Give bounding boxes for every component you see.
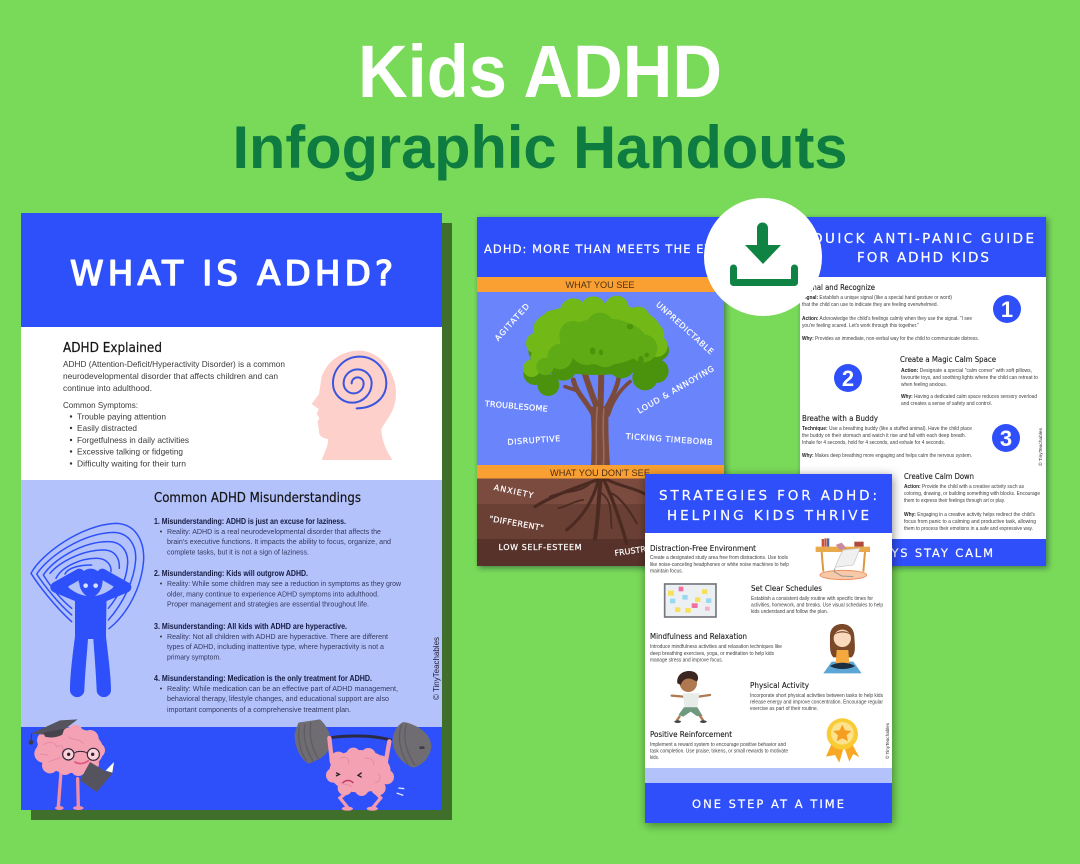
strategy 3 text: Introduce mindfulness activities and relaxation techniques like <box>650 644 782 650</box>
section: ADHD explained text: ADHD Explained <box>63 341 162 356</box>
step 4 text: focus from panic to a calming and productive task, allowing <box>904 519 1036 525</box>
step 2 text: Create a Magic Calm Space <box>900 355 996 364</box>
step 2 text: Why: Having a dedicated calm space reduces sensory overload <box>901 394 1037 400</box>
strategy 2 text: Establish a consistent daily routine with specific times for <box>751 596 873 602</box>
step 1 text: Signal and Recognize <box>802 283 875 292</box>
section: misunderstandings text: 1. Misunderstanding: ADHD is just an excuse for laziness. <box>154 517 346 526</box>
section: ADHD explained text: Excessive talking or fidgeting <box>77 446 183 456</box>
labels around tree: "DIFFERENT" <box>489 514 544 533</box>
credit: Tiny Teachables: © TinyTeachables <box>432 637 441 700</box>
section: misunderstandings text: 4. Misunderstanding: Medication is the only treatment for ADHD. <box>154 674 372 683</box>
section: ADHD explained text <box>63 341 285 468</box>
icon: number 1 <box>993 295 1021 323</box>
band: what you see: WHAT YOU SEE <box>566 280 634 291</box>
section: misunderstandings text: Reality: ADHD is a real neurodevelopmental disorder that affects the <box>167 527 381 536</box>
panel header: FOR ADHD KIDS <box>857 250 989 266</box>
step 4 text: Action: Provide the child with a creative activity such as <box>904 484 1024 490</box>
section: misunderstandings text: important components of a comprehensive treatment plan. <box>167 705 351 714</box>
icon: reward medal <box>826 718 859 763</box>
panel: ADHD more than meets the eye <box>477 217 724 566</box>
section: misunderstandings text <box>154 490 401 714</box>
strategy 5 text: task completion. Use praise, tokens, or small rewards to motivate <box>650 748 788 754</box>
step 1 text <box>802 283 979 342</box>
section: ADHD explained text: Common Symptoms: <box>63 400 138 410</box>
icon: exercising boy <box>672 671 710 723</box>
strategy 3 text: deep breathing exercises, yoga, or meditation to help kids <box>650 651 774 657</box>
title: Kids ADHD <box>358 30 722 113</box>
section: misunderstandings text: Common ADHD Misunderstandings <box>154 490 361 506</box>
icon: number 3: 3 <box>1000 426 1012 451</box>
panel header <box>800 217 1046 277</box>
icon: desk and chair <box>816 538 870 580</box>
section: misunderstandings text: brain's executive functions. It impacts the ability to focus, organize, and <box>167 537 391 546</box>
section: ADHD explained text: Trouble paying attention <box>77 412 166 422</box>
strategy 2 text: activities, homework, and breaks. Use visual schedules to help <box>751 602 883 608</box>
strategy 5 text: Implement a reward system to encourage positive behavior and <box>650 742 786 748</box>
section: ADHD explained text: Forgetfulness in daily activities <box>77 435 189 445</box>
panel footer: ALWAYS STAY CALM <box>853 546 993 560</box>
credit: © TinyTeachables <box>884 722 891 759</box>
step 1 text: you're feeling scared. Let's work through this together." <box>802 323 919 329</box>
section: misunderstandings text: primary symptom. <box>167 652 221 662</box>
panel: quick anti-panic guide <box>800 217 1046 566</box>
labels around tree: LOW SELF-ESTEEM <box>498 543 582 552</box>
labels around tree: UNPREDICTABLE <box>654 300 715 356</box>
panel header: what is ADHD <box>21 213 442 327</box>
icon: brain lifting barbell <box>295 719 431 811</box>
section: ADHD explained text: ADHD (Attention-Deficit/Hyperactivity Disorder) is a common <box>63 359 285 369</box>
step 2 text: Action: Designate a special "calm corner" with soft pillows, <box>901 368 1032 374</box>
strategy 4 text <box>750 681 883 712</box>
step 2 text: when feeling anxious. <box>900 382 947 388</box>
labels around tree: TROUBLESOME <box>483 399 548 414</box>
section: misunderstandings text: 2. Misunderstanding: Kids will outgrow ADHD. <box>154 569 308 578</box>
strategy 4 text: release energy and improve concentration. Encourage regular <box>750 700 883 706</box>
section: misunderstandings text: Reality: Not all children with ADHD are hyperactive. There are different <box>167 632 389 641</box>
labels around tree: AGITATED <box>493 302 531 343</box>
strategy 4 text: exercise as part of their routine. <box>750 706 818 712</box>
band: what you don't see <box>477 465 724 479</box>
band: what you don't see: WHAT YOU DON'T SEE <box>550 468 650 479</box>
panel header: HELPING KIDS THRIVE <box>667 508 869 524</box>
icon: head with spiral <box>312 351 396 460</box>
panel footer <box>800 539 1046 566</box>
step 3 text: Technique: Use a breathing buddy (like a stuffed animal). Have the child place <box>802 426 972 432</box>
labels around tree: TICKING TIMEBOMB <box>624 432 713 447</box>
section: ADHD explained text: Difficulty waiting for their turn <box>77 458 186 468</box>
strategy 2 text: kids understand and follow the plan. <box>751 609 828 615</box>
icon: download badge <box>704 198 822 316</box>
strategy 5 text <box>650 730 788 761</box>
panel footer: ONE STEP AT A TIME <box>692 797 844 811</box>
section: misunderstandings text: types of ADHD, including inattentive type, where hyperactivity is not a <box>167 642 385 651</box>
step 3 text: the buddy on their stomach and watch it rise and fall with each deep breath. <box>802 433 966 439</box>
step 3 text: Why: Makes deep breathing more engaging and helps calm the nervous system. <box>802 453 972 459</box>
labels around tree: FRUSTRATION <box>614 541 670 558</box>
panel header: QUICK ANTI-PANIC GUIDE <box>812 231 1034 247</box>
step 4 text: them to express their feelings through art or play. <box>904 498 1005 504</box>
labels around tree: DISRUPTIVE <box>507 434 561 447</box>
strategy 1 text <box>650 544 789 574</box>
panel footer <box>645 783 892 823</box>
step 1 text: Signal: Establish a unique signal (like a special hand gesture or word) <box>802 295 952 301</box>
step 1 text: Action: Acknowledge the child's feelings calmly when they use the signal. "I see <box>802 316 972 322</box>
strategy 4 text: Physical Activity <box>750 681 809 690</box>
panel header <box>477 217 724 277</box>
icon: number 3 <box>992 424 1020 452</box>
strategy 4 text: Incorporate short physical activities between tasks to help kids <box>750 693 883 699</box>
icon: number 2: 2 <box>842 366 854 391</box>
icon: meditating girl <box>823 624 862 673</box>
strategy 3 text: Mindfulness and Relaxation <box>650 632 747 641</box>
soil layers <box>477 478 724 566</box>
step 1 text: Why: Provides an immediate, non-verbal way for the child to communicate distress. <box>802 336 979 342</box>
strategy 1 text: Distraction-Free Environment <box>650 544 756 553</box>
section: misunderstandings text: Reality: While medication can be an effective part of ADHD management, <box>167 684 398 693</box>
strategy 1 text: Create a designated study area free from distractions. Use tools <box>650 555 788 561</box>
panel footer with brains <box>21 719 442 811</box>
section: misunderstandings text: complete tasks, but it is not a sign of laziness. <box>167 548 309 556</box>
icon: schedule board <box>665 584 716 617</box>
strategy 3 text <box>650 632 782 664</box>
strategy 1 text: maintain focus. <box>650 568 683 574</box>
panel header: ADHD: MORE THAN MEETS THE EYE <box>484 242 720 256</box>
strategy 2 text <box>751 584 883 615</box>
step 4 text <box>904 472 1040 532</box>
step 3 text: Breathe with a Buddy <box>802 414 878 423</box>
section: misunderstandings text: Proper management and strategies are essential throughout life. <box>167 600 369 608</box>
strategy 2 text: Set Clear Schedules <box>751 584 822 593</box>
panel header <box>645 474 892 533</box>
step 4 text: Why: Engaging in a creative activity helps redirect the child's <box>904 512 1035 518</box>
title: Infographic Handouts <box>232 114 848 181</box>
credit: © TinyTeachables <box>1037 427 1044 466</box>
labels around tree <box>483 300 716 558</box>
icon: number 1: 1 <box>1001 297 1013 322</box>
section: misunderstandings text: Reality: While some children may see a reduction in symptoms as they grow <box>167 579 401 588</box>
section: misunderstandings text: 3. Misunderstanding: All kids with ADHD are hyperactive. <box>154 622 347 631</box>
illustration: tree <box>523 296 669 465</box>
step 4 text: Creative Calm Down <box>904 472 974 481</box>
section: misunderstandings text: behavioral therapy, lifestyle changes, and educational support are also <box>167 694 389 703</box>
section: ADHD explained text: neurodevelopmental disorder that affects children and can <box>63 371 278 381</box>
step 3 text: Inhale for 4 seconds, hold for 4 seconds, and exhale for 4 seconds. <box>802 440 945 446</box>
panel: What is ADHD handout <box>21 213 452 820</box>
labels around tree: LOUD & ANNOYING <box>636 364 716 415</box>
panel: strategies for ADHD <box>645 474 892 823</box>
step 1 text: that the child can use to indicate they are feeling overwhelmed. <box>802 302 938 308</box>
step 2 text <box>900 355 1038 407</box>
section: misunderstandings text: older, many continue to experience ADHD symptoms into adulthood. <box>167 590 379 598</box>
strategy 3 text: manage stress and improve focus. <box>650 658 723 664</box>
icon: overwhelmed figure with swirls <box>31 523 144 697</box>
section background: misunderstandings <box>21 480 442 727</box>
step 4 text: coloring, drawing, or building something with blocks. Encourage <box>904 491 1040 497</box>
icon: brain with graduation cap and book <box>29 719 114 810</box>
section: ADHD explained text: Easily distracted <box>77 423 137 433</box>
labels around tree: ANXIETY <box>493 483 534 500</box>
step 3 text <box>802 414 972 459</box>
strategy 1 text: like noise-canceling headphones or white noise machines to help <box>650 562 789 568</box>
panel header: STRATEGIES FOR ADHD: <box>659 488 877 504</box>
step 4 text: them to process their emotions in a safe and expressive way. <box>904 526 1033 532</box>
strategy 5 text: Positive Reinforcement <box>650 730 732 739</box>
light strip <box>645 768 892 784</box>
step 2 text: and creates a sense of safety and control. <box>901 401 992 407</box>
strategy 5 text: kids. <box>650 755 659 761</box>
band: what you see <box>477 277 724 292</box>
panel header: what is ADHD: WHAT IS ADHD? <box>70 254 393 294</box>
title <box>232 30 848 181</box>
illustration: roots <box>535 479 647 543</box>
step 2 text: favourite toys, and soothing lights where the child can retreat to <box>901 375 1038 381</box>
section: ADHD explained text: continue into adulthood. <box>63 383 152 393</box>
icon: number 2 <box>834 364 862 392</box>
